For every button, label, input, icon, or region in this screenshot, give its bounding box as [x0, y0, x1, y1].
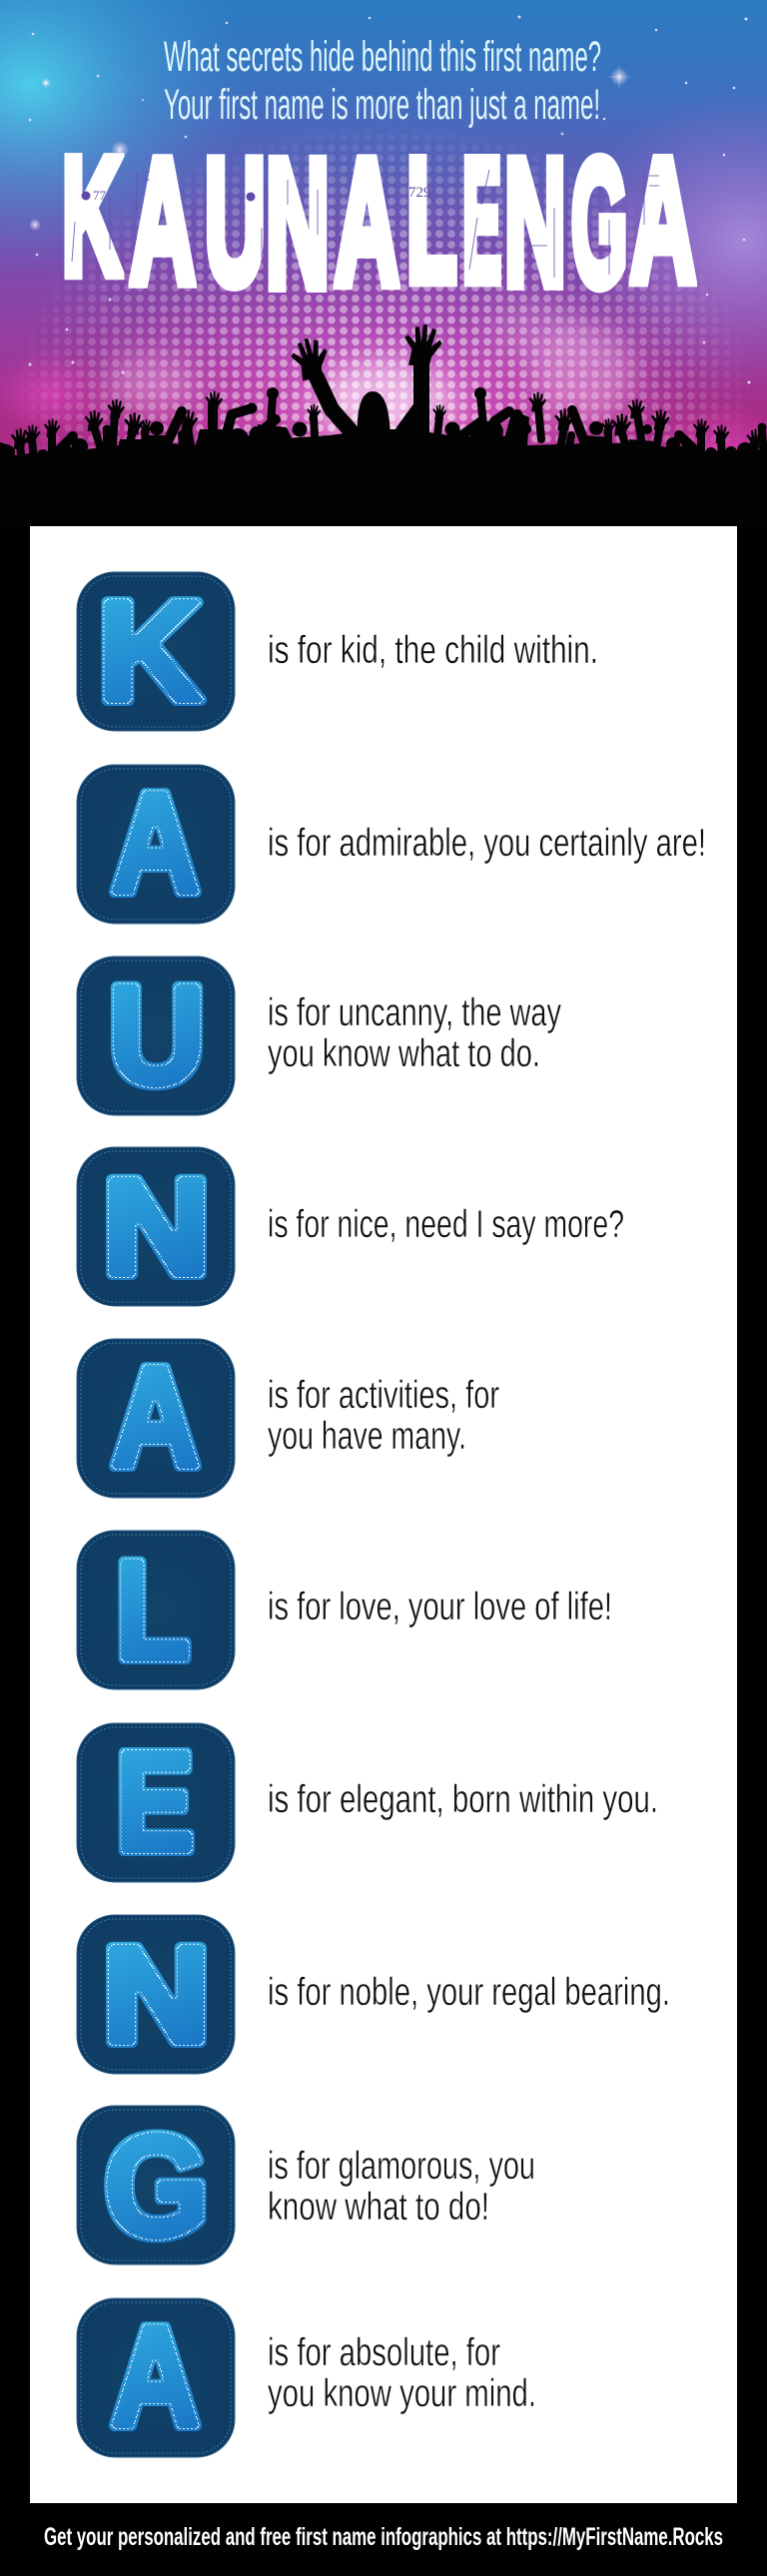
icon: letter A: [77, 1338, 235, 1498]
icon: letter G: G: [104, 2106, 209, 2266]
icon: letter N: [77, 1915, 235, 2074]
icon: letter K: K: [98, 572, 202, 731]
title: KAUNALENGA: A: [630, 123, 696, 319]
icon: letter L: L: [115, 1532, 190, 1688]
title: KAUNALENGA: N: [266, 123, 330, 325]
title: KAUNALENGA: G: [571, 123, 628, 323]
row U: [77, 957, 561, 1115]
text: 77: [93, 188, 106, 203]
crowd silhouette: [0, 324, 767, 526]
heads and shoulders: [1, 445, 15, 459]
row N: [77, 1147, 624, 1306]
row K: [77, 572, 598, 731]
text: K line: is for kid, the child within.: [268, 629, 598, 672]
title: KAUNALENGA: N: [504, 123, 566, 322]
text: U lines: you know what to do.: [268, 1032, 540, 1075]
text: G lines: know what to do!: [268, 2186, 489, 2229]
title: KAUNALENGA: A: [335, 123, 399, 322]
icon: letter A: [77, 764, 235, 924]
text: A lines: you have many.: [268, 1415, 466, 1458]
row A: [77, 764, 706, 924]
icon: letter L: [77, 1531, 235, 1689]
text: U lines: is for uncanny, the way: [268, 991, 561, 1034]
icon: letter A: A: [111, 1338, 200, 1497]
row A: [77, 1338, 499, 1498]
title: KAUNALENGA: L: [406, 123, 457, 319]
text: A lines: is for absolute, for: [268, 2331, 500, 2374]
white panel: [30, 526, 737, 2503]
text: 729: [408, 185, 431, 201]
icon: letter A: A: [111, 2297, 200, 2456]
text: L line: is for love, your love of life!: [268, 1586, 612, 1628]
raised arms: [20, 357, 764, 464]
row N: [77, 1915, 670, 2074]
hands: [11, 428, 30, 449]
row E: [77, 1722, 658, 1882]
icon: letter U: [77, 957, 235, 1115]
header concert background: [0, 0, 767, 455]
central figure head and hair: [350, 391, 401, 439]
icon: letter N: N: [102, 1151, 210, 1304]
icon: letter E: [77, 1722, 235, 1882]
text: G lines: is for glamorous, you: [268, 2145, 535, 2188]
row G: [77, 2106, 535, 2266]
icon: letter K: [77, 572, 235, 731]
icon: letter N: [77, 1147, 235, 1306]
title: KAUNALENGA: A: [130, 123, 196, 320]
title: KAUNALENGA: U: [205, 123, 266, 322]
icon: letter U: U: [109, 957, 206, 1113]
title: KAUNALENGA: K: [62, 124, 122, 310]
row A: [77, 2297, 536, 2457]
row L: [77, 1531, 612, 1689]
icon: letter A: A: [111, 764, 200, 923]
title: KAUNALENGA: [62, 123, 697, 325]
ground mass: [0, 429, 767, 526]
title: KAUNALENGA: E: [462, 123, 501, 319]
icon: letter A: [77, 2297, 235, 2457]
icon: letter E: E: [116, 1722, 195, 1880]
text: A lines: you know your mind.: [268, 2372, 536, 2415]
text: A lines: is for activities, for: [268, 1374, 499, 1417]
text: N line: is for nice, need I say more?: [268, 1203, 624, 1246]
header text: tagline: [164, 33, 601, 129]
icon: letter N: N: [102, 1919, 210, 2072]
